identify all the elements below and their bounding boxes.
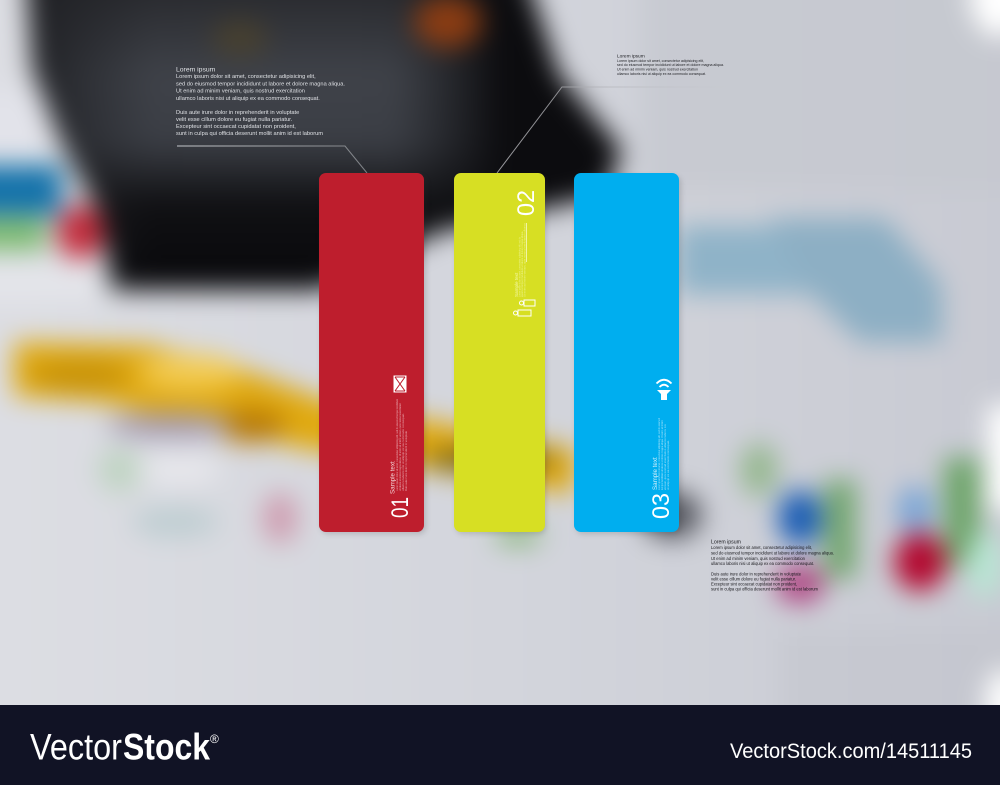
body text lines yellow: eiusmod tempor incididunt ut labore et dolore magna aliqua. — [521, 231, 524, 297]
icon: signal speaker — [656, 380, 672, 400]
body text lines blue: veniam, quis nostrud exercitation ullamco laboris nisi — [663, 424, 667, 490]
callout text: Lorem ipsum block 3: sed do eiusmod tempor incididunt ut labore et dolore magna aliqua. — [711, 550, 834, 556]
number 01: 01 — [387, 497, 414, 518]
callout text: Lorem ipsum block 1: Lorem ipsum dolor sit amet, consectetur adipisicing elit, — [176, 74, 316, 80]
callout text: Lorem ipsum block 2: Lorem ipsum — [617, 54, 645, 60]
logo: VectorStock wordmark — [30, 726, 219, 768]
callout text: Lorem ipsum block 1: Duis aute irure dolor in reprehenderit in voluptate — [176, 110, 299, 116]
callout text: Lorem ipsum block 3: Lorem ipsum — [711, 540, 741, 546]
callout text: Lorem ipsum block 1: sed do eiusmod tempor incididunt ut labore et dolore magna aliqua. — [176, 82, 345, 88]
body text lines red — [395, 399, 408, 491]
body text lines red: Duis aute irure dolor in reprehenderit in voluptate — [404, 430, 408, 491]
icon: envelope — [394, 376, 406, 392]
body text lines yellow: Ut enim ad minim veniam, quis nostrud exercitation ullamco — [524, 222, 526, 297]
panel: red column 01 — [319, 173, 426, 534]
callout text: Lorem ipsum block 1: ullamco laboris nisi ut aliquip ex ea commodo consequat. — [176, 96, 320, 102]
callout text: Lorem ipsum block 3: ullamco laboris nisi ut aliquip ex ea commodo consequat. — [711, 561, 814, 566]
callout text: Lorem ipsum block 1: Excepteur sint occaecat cupidatat non proident, — [176, 124, 296, 130]
body text lines yellow — [518, 222, 526, 297]
body text lines blue — [657, 418, 670, 490]
icon: two people — [514, 300, 535, 316]
callout text: Lorem ipsum block 1: Lorem ipsum — [176, 66, 216, 74]
number 03: 03 — [648, 493, 675, 519]
number 02: 02 — [513, 190, 540, 216]
body text lines red: ut labore et dolore magna aliqua. Ut enim ad minim veniam, quis nostrud exercitation — [398, 403, 402, 491]
callout text: Lorem ipsum block 3: velit esse cillum dolore eu fugiat nulla pariatur. — [711, 576, 796, 582]
callout text: Lorem ipsum block 1: Ut enim ad minim veniam, quis nostrud exercitation — [176, 89, 305, 95]
callout text: Lorem ipsum block 3: Lorem ipsum dolor sit amet, consectetur adipisicing elit, — [711, 545, 812, 550]
footer bar — [0, 705, 1000, 785]
logo: VectorStock wordmark: Vector — [30, 726, 122, 768]
callout text: Lorem ipsum block 3 — [711, 540, 834, 592]
heading: sample text red: Sample text — [390, 461, 396, 494]
callout text: Lorem ipsum block 1 — [176, 66, 345, 137]
heading: sample text yellow: Sample text — [514, 272, 519, 297]
white rule — [526, 223, 528, 262]
image id text: VectorStock.com/14511145 — [730, 740, 972, 763]
body text lines blue: ut aliquip ex ea commodo consequat. — [666, 440, 670, 490]
callout text: Lorem ipsum block 2: sed do eiusmod tempor incididunt ut labore et dolore magna aliqua. — [617, 62, 724, 67]
callout text: Lorem ipsum block 3: Duis aute irure dolor in reprehenderit in voluptate — [711, 572, 802, 576]
callout text: Lorem ipsum block 3: Ut enim ad minim veniam, quis nostrud exercitation — [711, 556, 806, 561]
heading: sample text blue: Sample text — [652, 457, 659, 490]
callout text: Lorem ipsum block 1: sunt in culpa qui officia deserunt mollit anim id est laborum — [176, 131, 323, 137]
body text lines red: ullamco laboris nisi ut aliquip ex ea commodo consequat. — [401, 413, 405, 491]
body text lines red: Lorem ipsum dolor sit amet, consectetur adipisicing elit, sed do eiusmod tempor incididunt — [395, 399, 399, 491]
body text lines blue: tempor incididunt ut labore et dolore magna aliqua. Ut enim ad minim — [660, 419, 664, 490]
body text lines blue: Lorem ipsum dolor sit amet, consectetur adipisicing elit, sed do eiusmod — [657, 418, 661, 490]
callout text: Lorem ipsum block 1: velit esse cillum dolore eu fugiat nulla pariatur. — [176, 117, 293, 123]
callout text: Lorem ipsum block 3: Excepteur sint occaecat cupidatat non proident, — [711, 582, 797, 586]
panel: yellow column 02 — [454, 173, 546, 534]
callout text: Lorem ipsum block 2: Lorem ipsum dolor sit amet, consectetur adipisicing elit, — [617, 58, 704, 63]
leader line to yellow column — [497, 87, 730, 173]
logo: VectorStock wordmark: Stock — [123, 726, 210, 768]
body text lines yellow: Lorem ipsum dolor sit amet, consectetur adipisicing elit, sed do — [518, 236, 522, 297]
panel: blue column 03 — [574, 173, 681, 534]
callout text: Lorem ipsum block 3: sunt in culpa qui officia deserunt mollit anim id est laborum — [711, 586, 818, 592]
logo: VectorStock wordmark: ® — [210, 732, 219, 746]
callout text: Lorem ipsum block 2: Ut enim ad minim veniam, quis nostrud exercitation — [617, 66, 698, 72]
leader line to red column — [177, 146, 367, 173]
callout text: Lorem ipsum block 2 — [617, 54, 724, 76]
callout text: Lorem ipsum block 2: ullamco laboris nisi ut aliquip ex ea commodo consequat. — [617, 71, 706, 76]
